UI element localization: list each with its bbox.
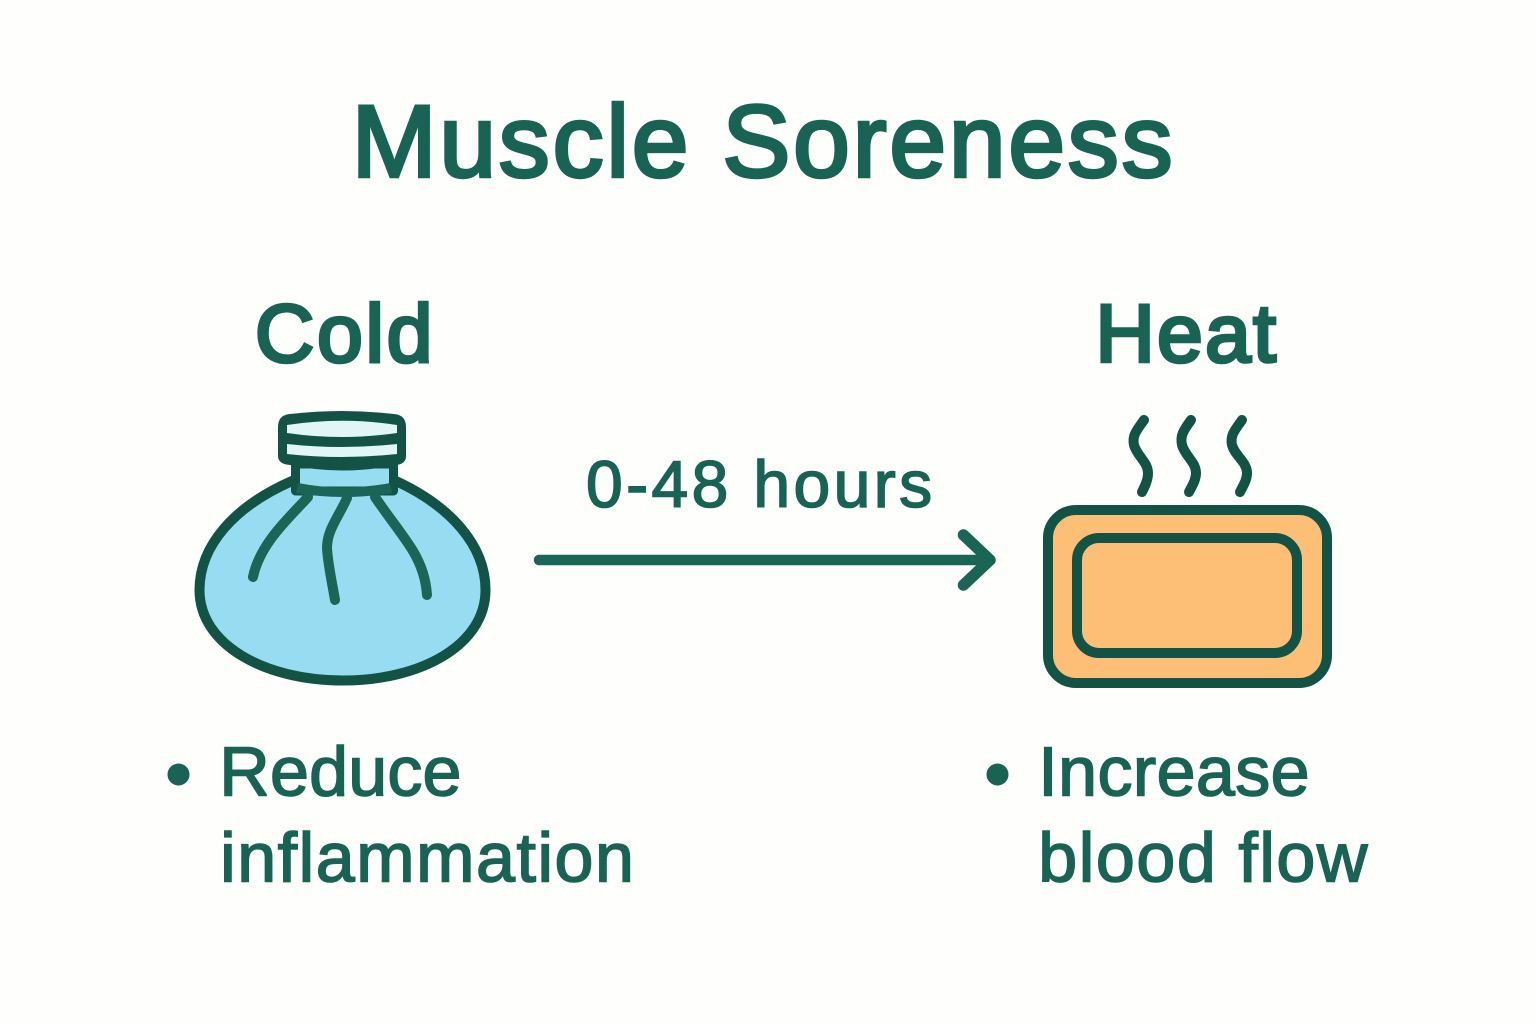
arrow: cold to heat [539, 535, 990, 585]
heading: cold: Cold [255, 288, 435, 380]
text block: heat benefit: blood flow [1038, 818, 1369, 896]
text block: cold benefit: inflammation [220, 818, 636, 896]
text block: heat benefit [986, 732, 1369, 896]
icon: ice bag [200, 411, 486, 680]
title: Muscle Soreness [352, 84, 1175, 198]
text block: cold benefit: Reduce [219, 732, 462, 810]
text block: heat benefit: Increase [1038, 732, 1310, 810]
icon: heat pad [1048, 420, 1327, 683]
heading: heat: Heat [1096, 288, 1278, 380]
label: duration: 0-48 hours [586, 447, 936, 521]
text block: cold benefit [168, 732, 636, 896]
